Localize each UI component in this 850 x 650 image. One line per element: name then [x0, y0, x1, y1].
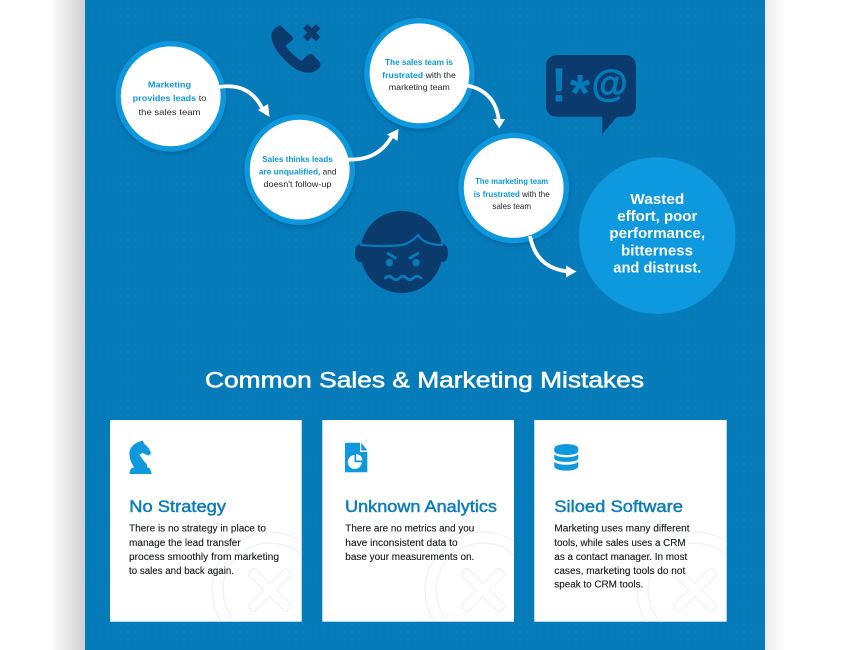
step 3 circle	[367, 21, 472, 126]
step 2 circle: doesn't follow-up	[264, 179, 332, 189]
card body: There are no metrics and you	[345, 524, 474, 535]
blue panel background	[85, 0, 765, 650]
step 1 circle: provides leads to	[133, 93, 207, 103]
card title: No Strategy	[129, 498, 227, 516]
icon: database	[554, 444, 578, 471]
arrow: marketing team to outcome	[530, 236, 576, 278]
outcome circle: Wasted	[630, 192, 684, 208]
outcome circle: performance,	[609, 226, 705, 242]
page shadow left	[50, 0, 85, 650]
card body	[554, 524, 690, 590]
icon: speech bubble with symbols: !	[551, 60, 567, 113]
step 1 circle: the sales team	[138, 107, 200, 117]
card title: Siloed Software	[554, 498, 683, 516]
icon: speech bubble with symbols	[546, 55, 636, 134]
icon: report document	[345, 443, 367, 472]
icon: angry face	[355, 211, 448, 293]
step 4 circle: is frustrated with the	[474, 189, 550, 199]
card body: manage the lead transfer	[129, 538, 241, 549]
outcome circle: and distrust.	[613, 261, 701, 277]
card body	[129, 524, 279, 577]
card body: to sales and back again.	[129, 566, 234, 577]
step 4 circle: The marketing team	[475, 176, 549, 186]
icon: speech bubble with symbols: @	[592, 63, 628, 104]
arrow: marketing to sales	[219, 86, 270, 117]
outcome circle: bitterness	[621, 244, 693, 260]
step 3 circle: marketing team	[389, 82, 450, 92]
step 3 circle: frustrated with the	[382, 70, 456, 80]
card body: base your measurements on.	[345, 552, 474, 563]
card body: Marketing uses many different	[554, 524, 690, 535]
step 1 circle	[118, 44, 223, 149]
card body: have inconsistent data to	[345, 538, 458, 549]
card title: Unknown Analytics	[345, 498, 497, 516]
heading: Common Sales & Marketing Mistakes	[205, 368, 644, 392]
card body: tools, while sales uses a CRM	[554, 538, 686, 549]
step 2 circle: Sales thinks leads	[262, 154, 333, 164]
page shadow right	[765, 0, 787, 650]
icon: chess knight	[129, 441, 152, 474]
card body: There is no strategy in place to	[129, 524, 266, 535]
outcome circle: effort, poor	[617, 209, 698, 225]
card: unknown analytics	[322, 420, 514, 622]
step 4 circle: sales team	[492, 201, 531, 211]
card body: speak to CRM tools.	[554, 579, 643, 590]
step 4 circle	[461, 135, 566, 241]
arrow: sales to sales team frustrated	[348, 129, 398, 160]
icon: speech bubble with symbols: *	[570, 65, 591, 123]
outcome circle	[579, 157, 736, 314]
card body: as a contact manager. In most	[554, 552, 688, 563]
step 2 circle	[247, 117, 352, 222]
step 1 circle: Marketing	[148, 80, 191, 90]
icon: phone with x	[271, 25, 321, 73]
card: siloed software	[534, 420, 727, 622]
card body: cases, marketing tools do not	[554, 566, 686, 577]
step 2 circle: are unqualified, and	[259, 166, 337, 176]
card: no strategy	[110, 420, 302, 622]
step 3 circle: The sales team is	[385, 57, 453, 67]
card body	[345, 524, 474, 563]
card body: process smoothly from marketing	[129, 552, 279, 563]
arrow: sales team to marketing team	[467, 86, 505, 128]
